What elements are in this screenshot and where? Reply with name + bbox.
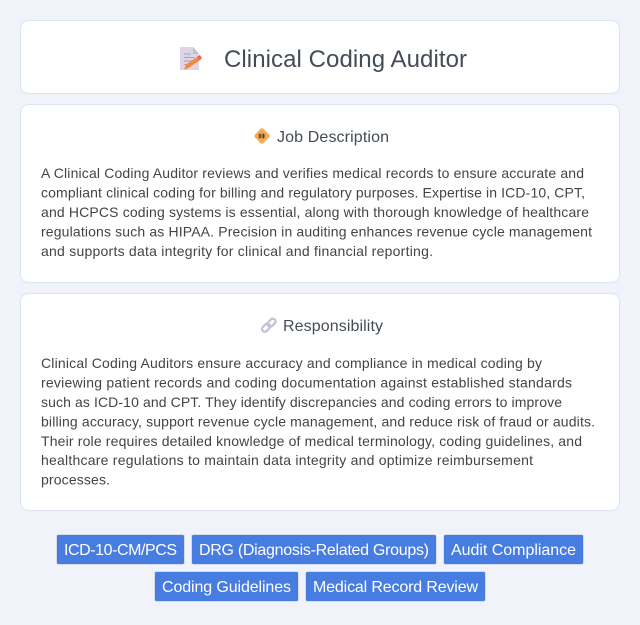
text block: responsibility: healthcare regulations to maintain data integrity and optimize reimbursement (41, 452, 533, 468)
text block: job description: regulations such as HIPAA. Precision in auditing enhances revenue cycle management (41, 224, 592, 240)
text block: responsibility: such as ICD-10 and CPT. They identify discrepancies and coding errors to improve (41, 394, 562, 410)
title: Clinical Coding Auditor (224, 46, 467, 73)
text block: responsibility: Their role requires detailed knowledge of medical terminology, coding guidelines, and (41, 433, 582, 449)
heading: job description: Job Description (277, 129, 389, 146)
tag: DRG (192, 534, 436, 564)
text block: job description (41, 165, 592, 259)
icon: link (261, 318, 277, 333)
text block: job description: A Clinical Coding Auditor reviews and verifies medical records to ensure accurate and (41, 165, 584, 181)
tag: coding guidelines: Coding Guidelines (162, 579, 291, 596)
tag: audit compliance: Audit Compliance (451, 542, 576, 559)
icon: orange diamond sign (254, 128, 270, 144)
text block: responsibility (41, 355, 595, 488)
panel: responsibility (20, 294, 620, 510)
text block: responsibility: Clinical Coding Auditors ensure accuracy and compliance in medical coding by (41, 355, 542, 371)
panel: job description (20, 104, 620, 282)
tag: ICD-10-CM/PCS (56, 534, 184, 564)
tag: medical record review: Medical Record Review (313, 579, 478, 596)
text block: responsibility: billing accuracy, support revenue cycle management, and reduce risk of fraud or audits. (41, 414, 595, 430)
tag: medical record review (306, 572, 486, 602)
tag: ICD-10-CM/PCS: ICD-10-CM/PCS (64, 542, 177, 559)
text block: job description: and HCPCS coding systems is essential, along with thorough knowledge of healthcare (41, 204, 589, 220)
icon: document with pencil (180, 47, 202, 70)
tag: DRG: DRG (Diagnosis-Related Groups) (199, 542, 429, 559)
text block: job description: compliant clinical coding for billing and regulatory purposes. Expertise in ICD-10, CPT, (41, 184, 585, 200)
panel: header (20, 20, 620, 94)
heading: responsibility: Responsibility (283, 318, 383, 335)
text block: responsibility: processes. (41, 472, 110, 488)
tag: coding guidelines (154, 572, 298, 602)
tag: audit compliance (444, 534, 584, 564)
text block: job description: and supports data integrity for clinical and financial reporting. (41, 243, 433, 259)
text block: responsibility: reviewing patient records and coding documentation against established standards (41, 374, 572, 390)
